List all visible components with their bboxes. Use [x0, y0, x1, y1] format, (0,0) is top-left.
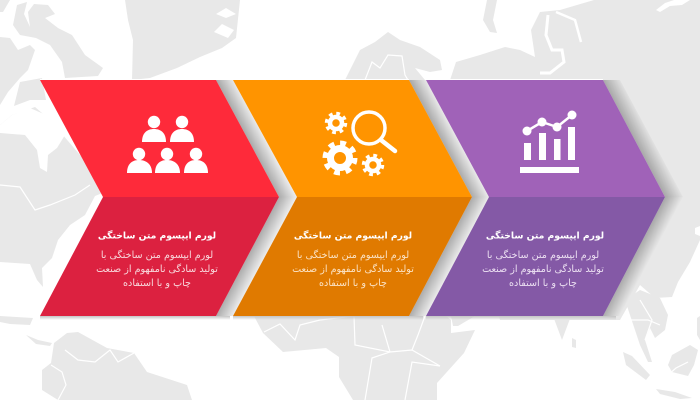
text: step 2: لورم ایپسوم متن ساختگی با — [297, 249, 409, 261]
icon: group of people — [127, 116, 208, 173]
text: step 1: تولید سادگی نامفهوم از صنعت — [96, 263, 218, 275]
text: step 3: لورم ایپسوم متن ساختگی — [486, 230, 604, 242]
text: step 1: چاپ و با استفاده — [123, 278, 191, 289]
panel: step 3 chart — [426, 79, 683, 320]
text: step 3: تولید سادگی نامفهوم از صنعت — [482, 263, 604, 275]
text: step 1: لورم ایپسوم متن ساختگی با — [101, 249, 213, 261]
text: step 2: تولید سادگی نامفهوم از صنعت — [292, 263, 414, 275]
text: step 3: لورم ایپسوم متن ساختگی با — [487, 249, 599, 261]
icon: bar chart with trend line — [520, 110, 579, 173]
text: step 2 — [292, 230, 414, 289]
panel: step 2 search and gears — [233, 79, 489, 320]
text: step 2: لورم ایپسوم متن ساختگی — [294, 230, 412, 242]
text: step 1 — [96, 230, 218, 289]
text: step 3: چاپ و با استفاده — [509, 278, 577, 289]
text: step 3 — [482, 230, 604, 289]
icon: magnifier with gears — [325, 112, 395, 174]
panel: step 1 people — [40, 79, 297, 320]
text: step 2: چاپ و با استفاده — [319, 278, 387, 289]
text: step 1: لورم ایپسوم متن ساختگی — [98, 230, 216, 242]
